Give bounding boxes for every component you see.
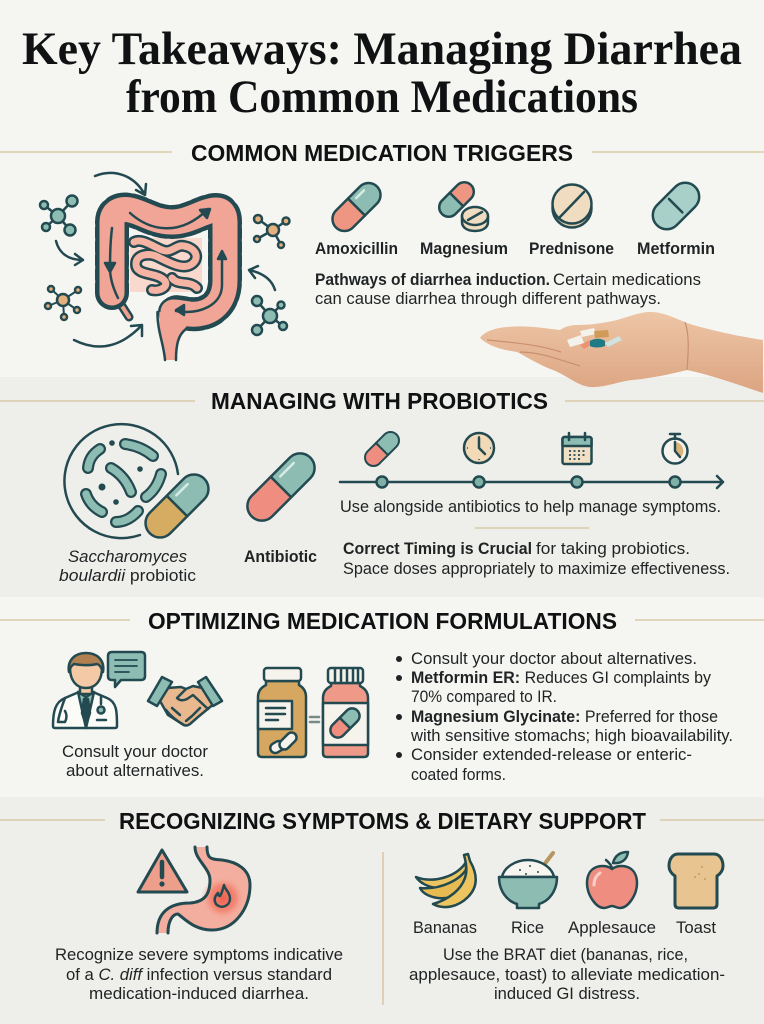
icon: doctor bbox=[53, 653, 117, 728]
text: BRAT diet: Use the BRAT diet (bananas, rice, bbox=[443, 945, 688, 964]
text: BRAT diet bbox=[409, 945, 725, 1003]
label: probiotic bbox=[59, 547, 197, 585]
text: correct timing: for taking probiotics. bbox=[536, 539, 690, 558]
icon: antibiotic capsule bbox=[241, 447, 321, 527]
panel: managing with probiotics bbox=[0, 388, 764, 585]
bullet list: formulation advice: Consider extended-release or enteric- bbox=[411, 745, 692, 764]
label: antibiotic: Antibiotic bbox=[244, 547, 317, 566]
text: pathways bbox=[315, 270, 701, 308]
bullet list: formulation advice: with sensitive stomachs; high bioavailability. bbox=[410, 726, 733, 745]
label: consult your doctor: about alternatives. bbox=[66, 761, 204, 780]
title bbox=[22, 23, 742, 123]
bullet list: formulation advice: Metformin ER: Reduces GI complaints by bbox=[411, 668, 711, 687]
icon: probiotic capsule bbox=[140, 469, 214, 543]
text: correct timing: Correct Timing is Crucial bbox=[343, 539, 532, 558]
panel: optimizing medication formulations bbox=[0, 608, 764, 784]
equals sign bbox=[310, 717, 319, 722]
text: recognize severe symptoms: of a C. diff infection versus standard bbox=[66, 965, 332, 984]
icon: brown pill bottle bbox=[258, 668, 306, 757]
bullet list: formulation advice: Consult your doctor about alternatives. bbox=[411, 649, 697, 668]
icon: warning triangle bbox=[138, 850, 187, 892]
icon: intestines bbox=[105, 209, 226, 360]
panel: recognizing symptoms and dietary support bbox=[0, 808, 764, 1005]
timeline arrow bbox=[340, 476, 723, 488]
icon: molecule bottom left bbox=[45, 286, 81, 320]
bullet list: formulation advice bbox=[396, 649, 733, 784]
text: use alongside antibiotics: Use alongside antibiotics to help manage symptoms. bbox=[340, 497, 721, 516]
icon: toast bbox=[669, 854, 723, 908]
icon: amoxicillin capsule bbox=[328, 178, 385, 236]
icon: speech bubble bbox=[108, 652, 145, 687]
label: probiotic: boulardii probiotic bbox=[59, 566, 197, 585]
icon: clock bbox=[464, 433, 494, 463]
bullet list: formulation advice: coated forms. bbox=[411, 765, 506, 784]
icon: molecule top left bbox=[40, 196, 78, 236]
icon: red pill bottle bbox=[323, 668, 368, 757]
panel: common medication triggers bbox=[0, 140, 764, 360]
icon: apple bbox=[587, 852, 637, 908]
label: magnesium: Magnesium bbox=[420, 239, 508, 258]
text: recognize severe symptoms bbox=[55, 945, 343, 1003]
label: toast: Toast bbox=[676, 918, 716, 937]
icon: magnesium capsule and tablet bbox=[435, 178, 488, 231]
icon: timeline pill bbox=[361, 428, 403, 470]
icon: molecule top right bbox=[254, 215, 290, 248]
icon: prednisone tablet bbox=[552, 184, 592, 228]
arrow: left bbox=[56, 241, 83, 265]
bullet list: formulation advice: 70% compared to IR. bbox=[411, 687, 557, 706]
label: consult your doctor bbox=[62, 742, 208, 780]
heading: triggers: COMMON MEDICATION TRIGGERS bbox=[191, 140, 573, 166]
title: from Common Medications bbox=[126, 71, 638, 123]
icon: stomach bbox=[157, 847, 250, 933]
text: BRAT diet: induced GI distress. bbox=[494, 984, 640, 1003]
arrow: top bbox=[95, 173, 146, 195]
icon: probiotic culture dish bbox=[64, 424, 178, 538]
text: correct timing: Space doses appropriately to maximize effectiveness. bbox=[343, 559, 730, 578]
arrow: right bbox=[249, 266, 275, 290]
icon: calendar bbox=[562, 433, 592, 464]
label: bananas: Bananas bbox=[413, 918, 477, 937]
text: correct timing bbox=[343, 539, 730, 578]
bullet list: formulation advice: Magnesium Glycinate: Preferred for those bbox=[411, 707, 718, 726]
text: pathways: Certain medications bbox=[553, 270, 701, 289]
icon: metformin capsule bbox=[647, 177, 705, 235]
arrow: bottom bbox=[74, 325, 142, 347]
label: probiotic: Saccharomyces bbox=[68, 547, 187, 566]
heading: formulations: OPTIMIZING MEDICATION FORMULATIONS bbox=[148, 608, 617, 634]
label: rice: Rice bbox=[511, 918, 544, 937]
text: recognize severe symptoms: Recognize severe symptoms indicative bbox=[55, 945, 343, 964]
text: BRAT diet: applesauce, toast) to alleviate medication- bbox=[409, 965, 725, 984]
label: consult your doctor: Consult your doctor bbox=[62, 742, 208, 761]
icon: bananas bbox=[416, 854, 476, 907]
icon: molecule bottom right bbox=[252, 296, 287, 335]
label: amoxicillin: Amoxicillin bbox=[315, 239, 398, 258]
label: metformin: Metformin bbox=[637, 239, 715, 258]
illustration: hand holding pills bbox=[480, 312, 763, 393]
icon: rice bowl bbox=[499, 853, 557, 908]
title: Key Takeaways: Managing Diarrhea bbox=[22, 23, 742, 75]
text: pathways: Pathways of diarrhea induction. bbox=[315, 270, 550, 289]
icon: stopwatch bbox=[662, 434, 688, 464]
heading: symptoms and diet: RECOGNIZING SYMPTOMS & DIETARY SUPPORT bbox=[119, 808, 646, 834]
icon: handshake bbox=[148, 677, 222, 726]
heading: probiotics: MANAGING WITH PROBIOTICS bbox=[211, 388, 548, 414]
text: pathways: can cause diarrhea through different pathways. bbox=[315, 289, 661, 308]
label: applesauce: Applesauce bbox=[568, 918, 656, 937]
label: prednisone: Prednisone bbox=[529, 239, 614, 258]
text: recognize severe symptoms: medication-induced diarrhea. bbox=[89, 984, 309, 1003]
